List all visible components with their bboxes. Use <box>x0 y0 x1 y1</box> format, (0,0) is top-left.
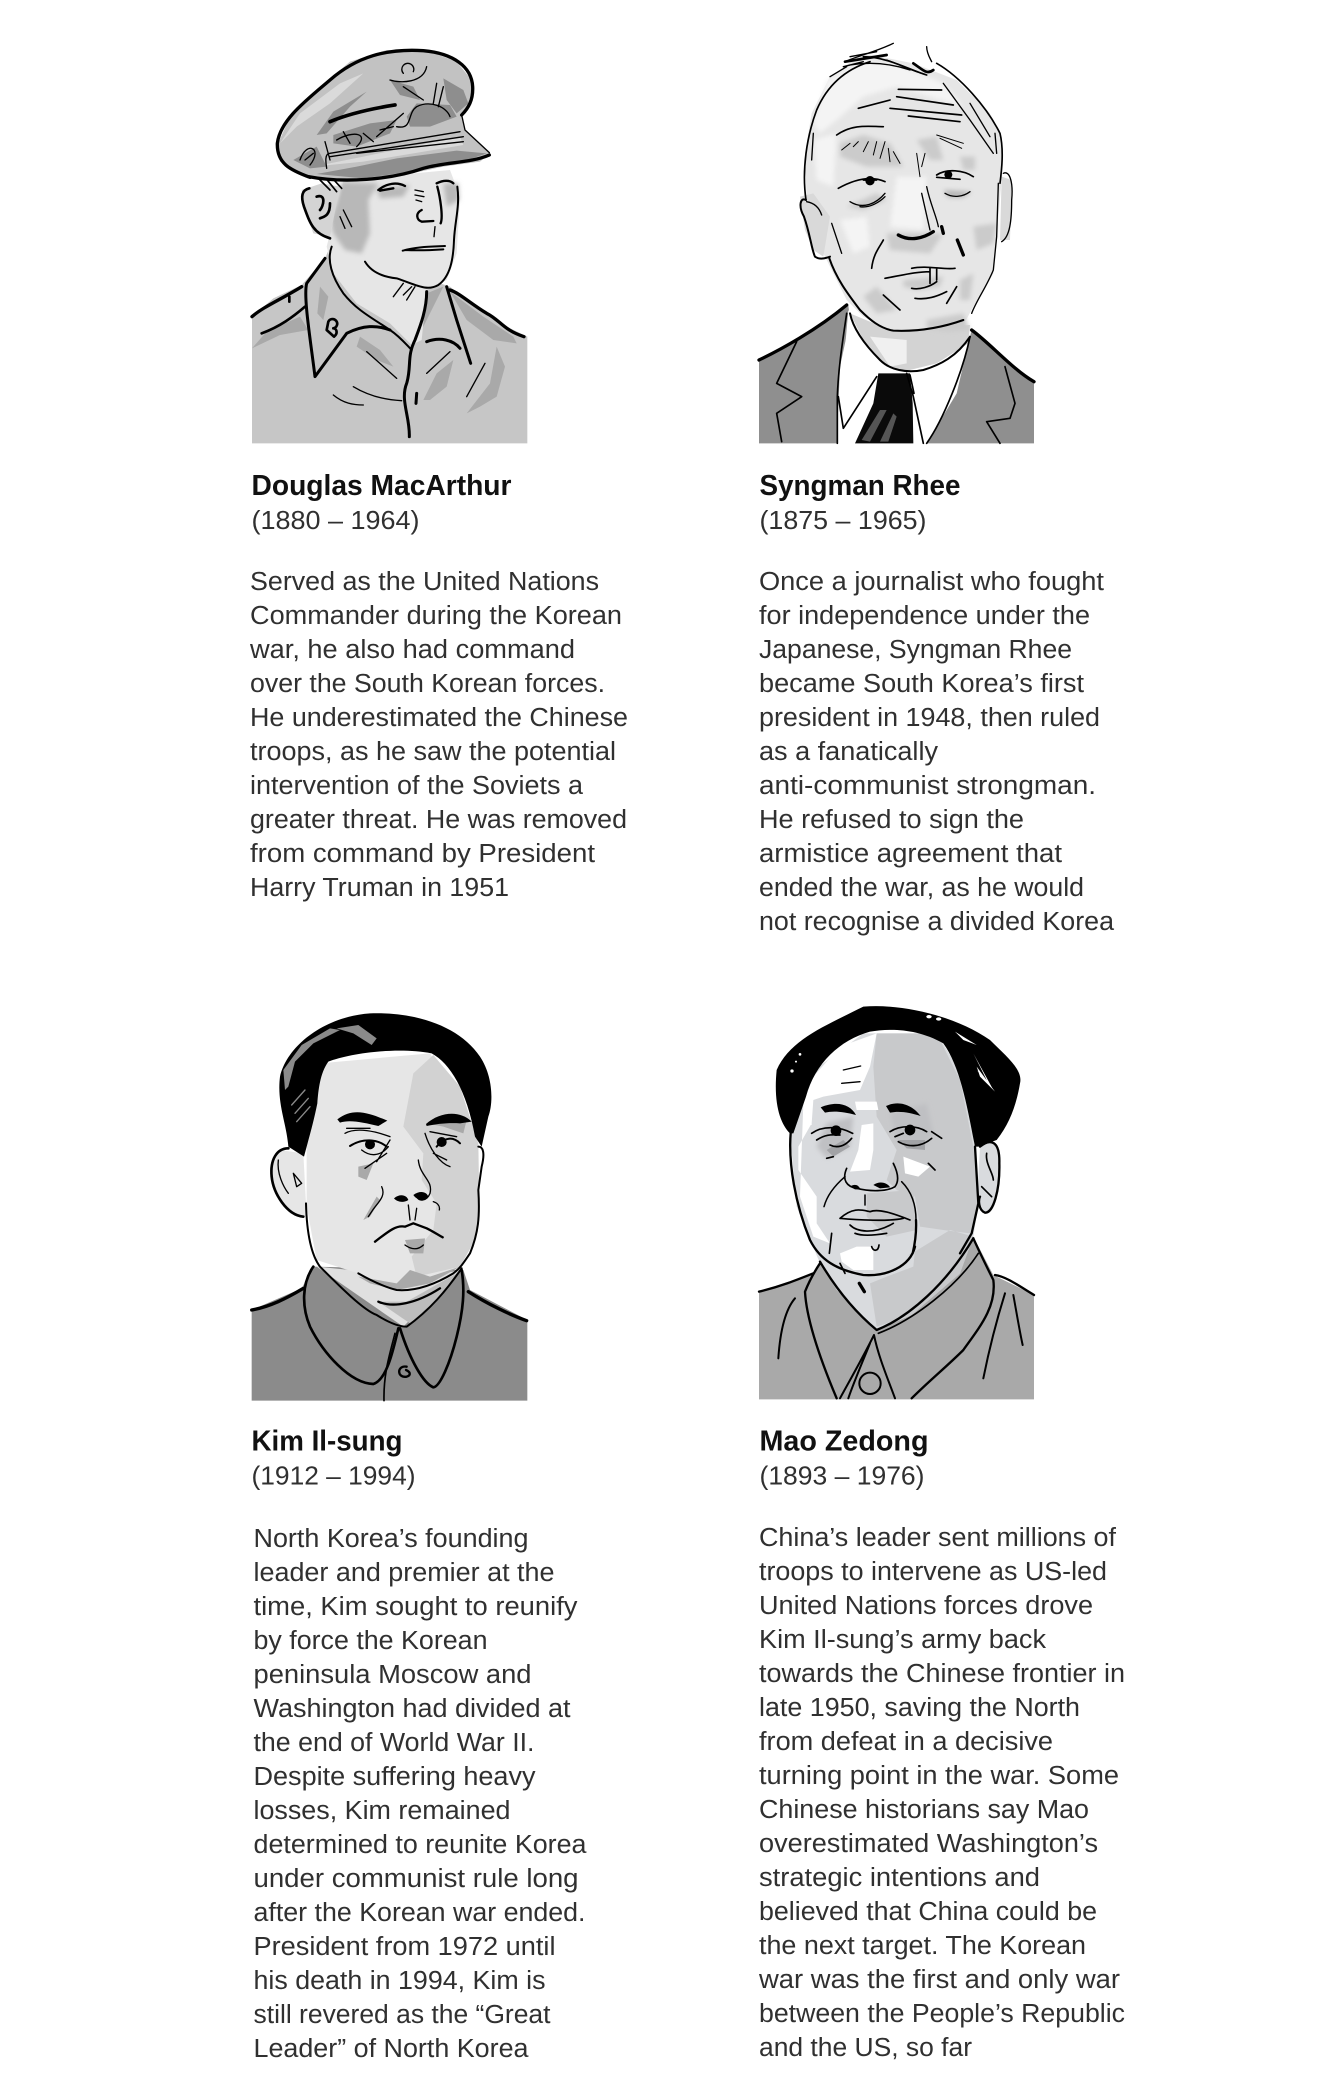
biography: Mao Zedong: believed that China could be <box>759 1896 1097 1926</box>
biography: Syngman Rhee: ended the war, as he would <box>759 872 1084 902</box>
biography: Mao Zedong: Chinese historians say Mao <box>759 1794 1089 1824</box>
biography: Mao Zedong: between the People’s Republic <box>759 1998 1125 2028</box>
biography: Kim Il-sung: losses, Kim remained <box>254 1795 510 1825</box>
biography: Kim Il-sung: under communist rule long <box>254 1863 578 1893</box>
biography: Mao Zedong: late 1950, saving the North <box>759 1692 1080 1722</box>
biography: Douglas MacArthur: war, he also had command <box>249 634 575 664</box>
years: Douglas MacArthur: (1880 – 1964) <box>252 505 420 535</box>
biography: Douglas MacArthur: intervention of the Soviets a <box>250 770 583 800</box>
biography: Syngman Rhee: president in 1948, then ruled <box>759 702 1100 732</box>
years: Syngman Rhee: (1875 – 1965) <box>760 505 926 535</box>
biography: Mao Zedong: war was the first and only war <box>758 1964 1120 1994</box>
name: Mao Zedong: Mao Zedong <box>760 1426 928 1458</box>
panel: Mao Zedong <box>758 1006 1125 2062</box>
name: Syngman Rhee: Syngman Rhee <box>760 470 960 502</box>
biography: Mao Zedong: China’s leader sent millions of <box>759 1522 1117 1552</box>
biography: Kim Il-sung: leader and premier at the <box>254 1557 554 1587</box>
biography: Mao Zedong: and the US, so far <box>759 2032 972 2062</box>
portrait: Kim Il-sung <box>252 1013 527 1401</box>
biography: Syngman Rhee: for independence under the <box>759 600 1090 630</box>
years: Kim Il-sung: (1912 – 1994) <box>252 1460 416 1490</box>
biography: Mao Zedong: Kim Il-sung’s army back <box>759 1624 1047 1654</box>
biography: Kim Il-sung: President from 1972 until <box>254 1931 556 1961</box>
biography: Mao Zedong <box>758 1522 1125 2062</box>
biography: Douglas MacArthur: He underestimated the Chinese <box>250 702 628 732</box>
biography: Syngman Rhee: became South Korea’s first <box>759 668 1085 698</box>
biography: Mao Zedong: strategic intentions and <box>759 1862 1040 1892</box>
biography: Syngman Rhee: Japanese, Syngman Rhee <box>759 634 1072 664</box>
name: Douglas MacArthur: Douglas MacArthur <box>252 470 512 502</box>
biography: Mao Zedong: troops to intervene as US-led <box>759 1556 1107 1586</box>
biography: Mao Zedong: from defeat in a decisive <box>759 1726 1053 1756</box>
biography: Mao Zedong: the next target. The Korean <box>759 1930 1086 1960</box>
biography: Kim Il-sung: North Korea’s founding <box>254 1523 528 1553</box>
biography: Douglas MacArthur: over the South Korean forces. <box>250 668 605 698</box>
biography: Kim Il-sung: the end of World War II. <box>254 1727 534 1757</box>
biography: Kim Il-sung: determined to reunite Korea <box>254 1829 587 1859</box>
biography: Douglas MacArthur: Served as the United Nations <box>250 566 599 596</box>
portrait: Douglas MacArthur <box>252 50 527 443</box>
biography: Douglas MacArthur: Harry Truman in 1951 <box>250 872 509 902</box>
biography: Kim Il-sung: still revered as the “Great <box>254 1999 551 2029</box>
biography: Kim Il-sung: after the Korean war ended. <box>254 1897 586 1927</box>
biography: Syngman Rhee: as a fanatically <box>759 736 939 766</box>
years: Mao Zedong: (1893 – 1976) <box>760 1460 924 1490</box>
biography: Kim Il-sung: Despite suffering heavy <box>254 1761 536 1791</box>
biography: Douglas MacArthur <box>249 566 628 902</box>
panel: Douglas MacArthur <box>249 50 628 902</box>
panel: Kim Il-sung <box>252 1013 587 2063</box>
biography: Mao Zedong: overestimated Washington’s <box>759 1828 1098 1858</box>
biography: Douglas MacArthur: Commander during the Korean <box>250 600 622 630</box>
biography: Douglas MacArthur: from command by President <box>250 838 596 868</box>
biography: Mao Zedong: United Nations forces drove <box>759 1590 1093 1620</box>
biography: Mao Zedong: towards the Chinese frontier in <box>759 1658 1125 1688</box>
portrait: Syngman Rhee <box>759 43 1034 443</box>
biography: Kim Il-sung: Leader” of North Korea <box>254 2033 529 2063</box>
biography: Douglas MacArthur: greater threat. He was removed <box>250 804 627 834</box>
biography: Syngman Rhee: not recognise a divided Korea <box>759 906 1114 936</box>
biography: Syngman Rhee: He refused to sign the <box>759 804 1024 834</box>
biography: Syngman Rhee: anti-communist strongman. <box>759 770 1096 800</box>
panel: Syngman Rhee <box>759 43 1114 936</box>
biography: Douglas MacArthur: troops, as he saw the potential <box>250 736 616 766</box>
biography: Kim Il-sung: time, Kim sought to reunify <box>254 1591 578 1621</box>
biography: Kim Il-sung: his death in 1994, Kim is <box>254 1965 546 1995</box>
biography: Kim Il-sung <box>254 1523 587 2063</box>
biography: Mao Zedong: turning point in the war. Some <box>759 1760 1119 1790</box>
biography: Syngman Rhee <box>759 566 1114 936</box>
biography: Syngman Rhee: armistice agreement that <box>759 838 1063 868</box>
name: Kim Il-sung: Kim Il-sung <box>252 1426 402 1458</box>
biography: Kim Il-sung: peninsula Moscow and <box>254 1659 532 1689</box>
biography: Kim Il-sung: Washington had divided at <box>254 1693 571 1723</box>
biography: Kim Il-sung: by force the Korean <box>254 1625 488 1655</box>
biography: Syngman Rhee: Once a journalist who fought <box>759 566 1105 596</box>
portrait: Mao Zedong <box>759 1006 1034 1399</box>
